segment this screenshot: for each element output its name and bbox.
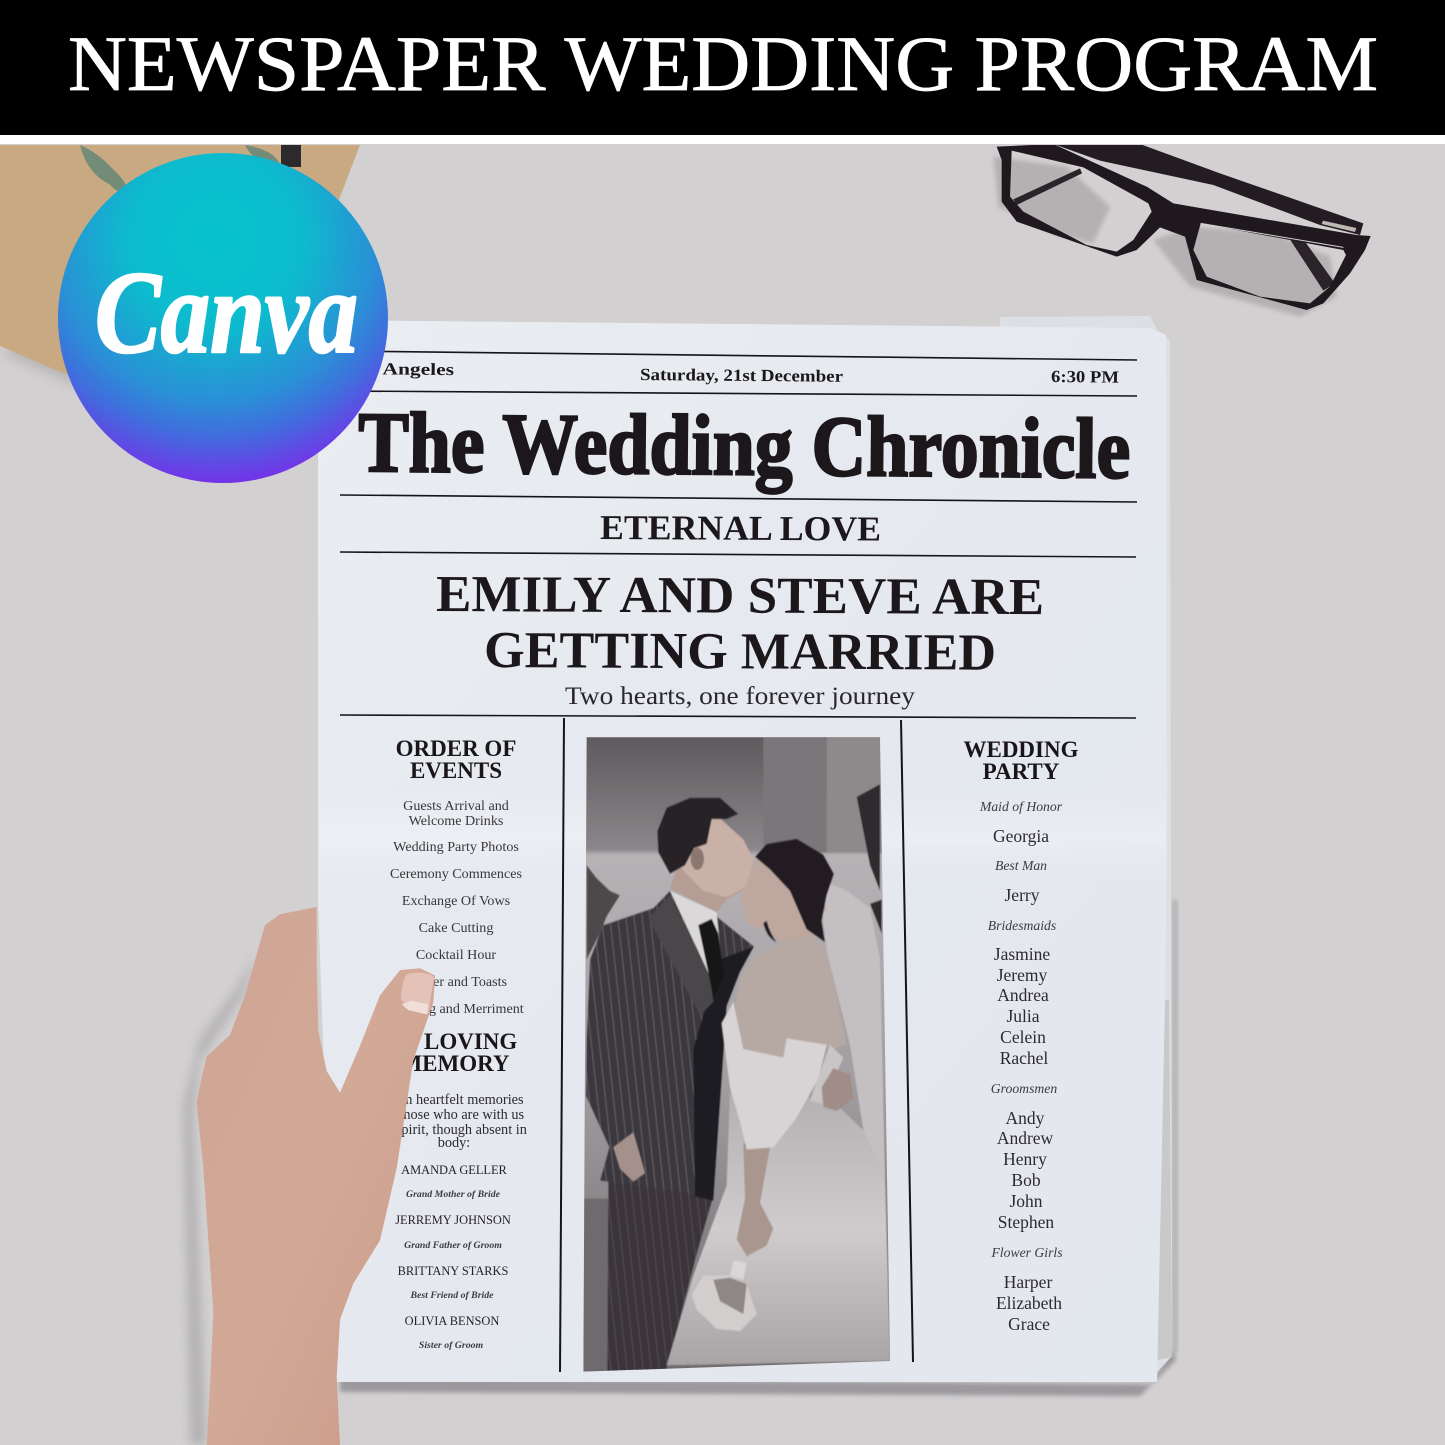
newspaper front page [318,320,1167,1382]
column: in loving memory: of those who are with us [384,1107,525,1123]
column: wedding party: Jasmine [994,944,1050,964]
couple photo [580,733,897,1378]
column: in loving memory [381,1029,527,1351]
column: in loving memory: in spirit, though absent in [381,1122,527,1138]
column: wedding party: Bridesmaids [988,918,1056,933]
column: wedding party: Bob [1011,1170,1041,1190]
column: in loving memory: IN LOVING [393,1029,517,1054]
hand holding newspaper [183,907,435,1445]
dateline: Saturday, 21st December [640,365,844,386]
column: order of events: Guests Arrival and [403,798,509,814]
column: in loving memory: Sister of Groom [419,1340,483,1351]
dateline [345,359,1119,387]
subheadline: Two hearts, one forever journey [565,683,916,710]
column: order of events: Exchange Of Vows [402,893,510,909]
headline [436,566,1044,682]
groom ear [691,848,704,870]
column: wedding party: Henry [1003,1149,1047,1169]
column: order of events: Ceremony Commences [390,866,522,882]
column: wedding party: Georgia [993,826,1049,846]
thumbnail [401,973,434,1014]
column: wedding party: Groomsmen [991,1081,1057,1096]
column: wedding party: WEDDING [963,737,1079,762]
newspaper name: The Wedding Chronicle [358,394,1131,497]
column: in loving memory: MEMORY [400,1051,510,1076]
column: wedding party: Andrea [997,985,1049,1005]
column: wedding party: Celein [1000,1027,1046,1047]
column: in loving memory: With heartfelt memories [384,1092,524,1108]
column: wedding party: John [1009,1191,1043,1211]
column: in loving memory: AMANDA GELLER [401,1163,508,1177]
column: order of events [388,736,524,1017]
column: wedding party: Rachel [1000,1048,1048,1068]
groom neck and head [670,867,744,912]
groom hand and cuff [613,1132,645,1181]
title banner [0,0,1445,144]
frame [997,144,1371,310]
column: wedding party: Stephen [998,1212,1054,1232]
plant [587,865,620,959]
tagline: ETERNAL LOVE [600,508,881,548]
column: wedding party: Elizabeth [996,1293,1062,1313]
column: wedding party: Harper [1004,1272,1052,1292]
column: in loving memory: Best Friend of Bride [409,1290,494,1301]
column: in loving memory: body: [438,1135,470,1151]
veil [822,882,885,1181]
dateline: 6:30 PM [1051,367,1119,387]
tie [698,919,724,998]
column: order of events: ORDER OF [396,736,516,761]
glasses [993,144,1371,317]
column: order of events: Dancing and Merriment [388,1001,524,1017]
pale lower wall [584,1198,609,1318]
temple arm [1053,144,1363,235]
headline: EMILY AND STEVE ARE [436,566,1044,626]
bouquet [730,1261,747,1280]
column: order of events: EVENTS [410,758,502,783]
column: order of events: Wedding Party Photos [393,839,519,855]
shirt [670,891,722,976]
masthead rules [340,351,1137,1372]
Canva badge: Canva [95,247,358,378]
column: wedding party: Jeremy [997,965,1048,985]
column: wedding party: Jerry [1005,885,1040,905]
newspaper stack edges [1000,316,1178,1380]
column: wedding party: Julia [1006,1006,1040,1026]
column: order of events: Welcome Drinks [409,813,503,829]
column: in loving memory: BRITTANY STARKS [398,1264,509,1278]
groom trousers [607,1177,713,1372]
column: in loving memory: JERREMY JOHNSON [395,1213,511,1227]
column: wedding party: Andrew [997,1128,1054,1148]
lapel [648,895,713,1015]
column: in loving memory: Grand Father of Groom [404,1240,502,1251]
column: wedding party: Best Man [995,858,1047,873]
column: wedding party: PARTY [983,759,1060,784]
column: wedding party [963,737,1079,1334]
column: order of events: Dinner and Toasts [405,974,507,990]
title banner: NEWSPAPER WEDDING PROGRAM [68,20,1378,107]
dark shape behind bride [857,784,880,891]
column: in loving memory: OLIVIA BENSON [405,1314,499,1328]
dateline: Los Angeles [345,359,455,379]
column: in loving memory: Grand Mother of Bride [406,1189,501,1200]
column: order of events: Cocktail Hour [416,947,496,963]
Canva badge [58,153,388,483]
bride back [733,934,847,1058]
column: wedding party: Grace [1008,1314,1050,1334]
column: wedding party: Maid of Honor [979,799,1063,814]
headline: GETTING MARRIED [484,622,996,682]
organza sleeve [722,1002,827,1149]
newspaper shadow [340,1350,1176,1396]
groom jacket [586,891,754,1201]
groom hand on bride [822,1068,853,1111]
bride hair [755,839,834,942]
jacket dark centre [693,946,754,1201]
bride dress [667,1092,890,1365]
column: order of events: Cake Cutting [419,920,493,936]
kraft envelope with foliage [0,145,360,386]
bride face [740,857,827,942]
column: wedding party: Andy [1006,1108,1045,1128]
groom hair [657,798,738,874]
column: wedding party: Flower Girls [990,1245,1063,1260]
bride arm [737,1143,773,1256]
